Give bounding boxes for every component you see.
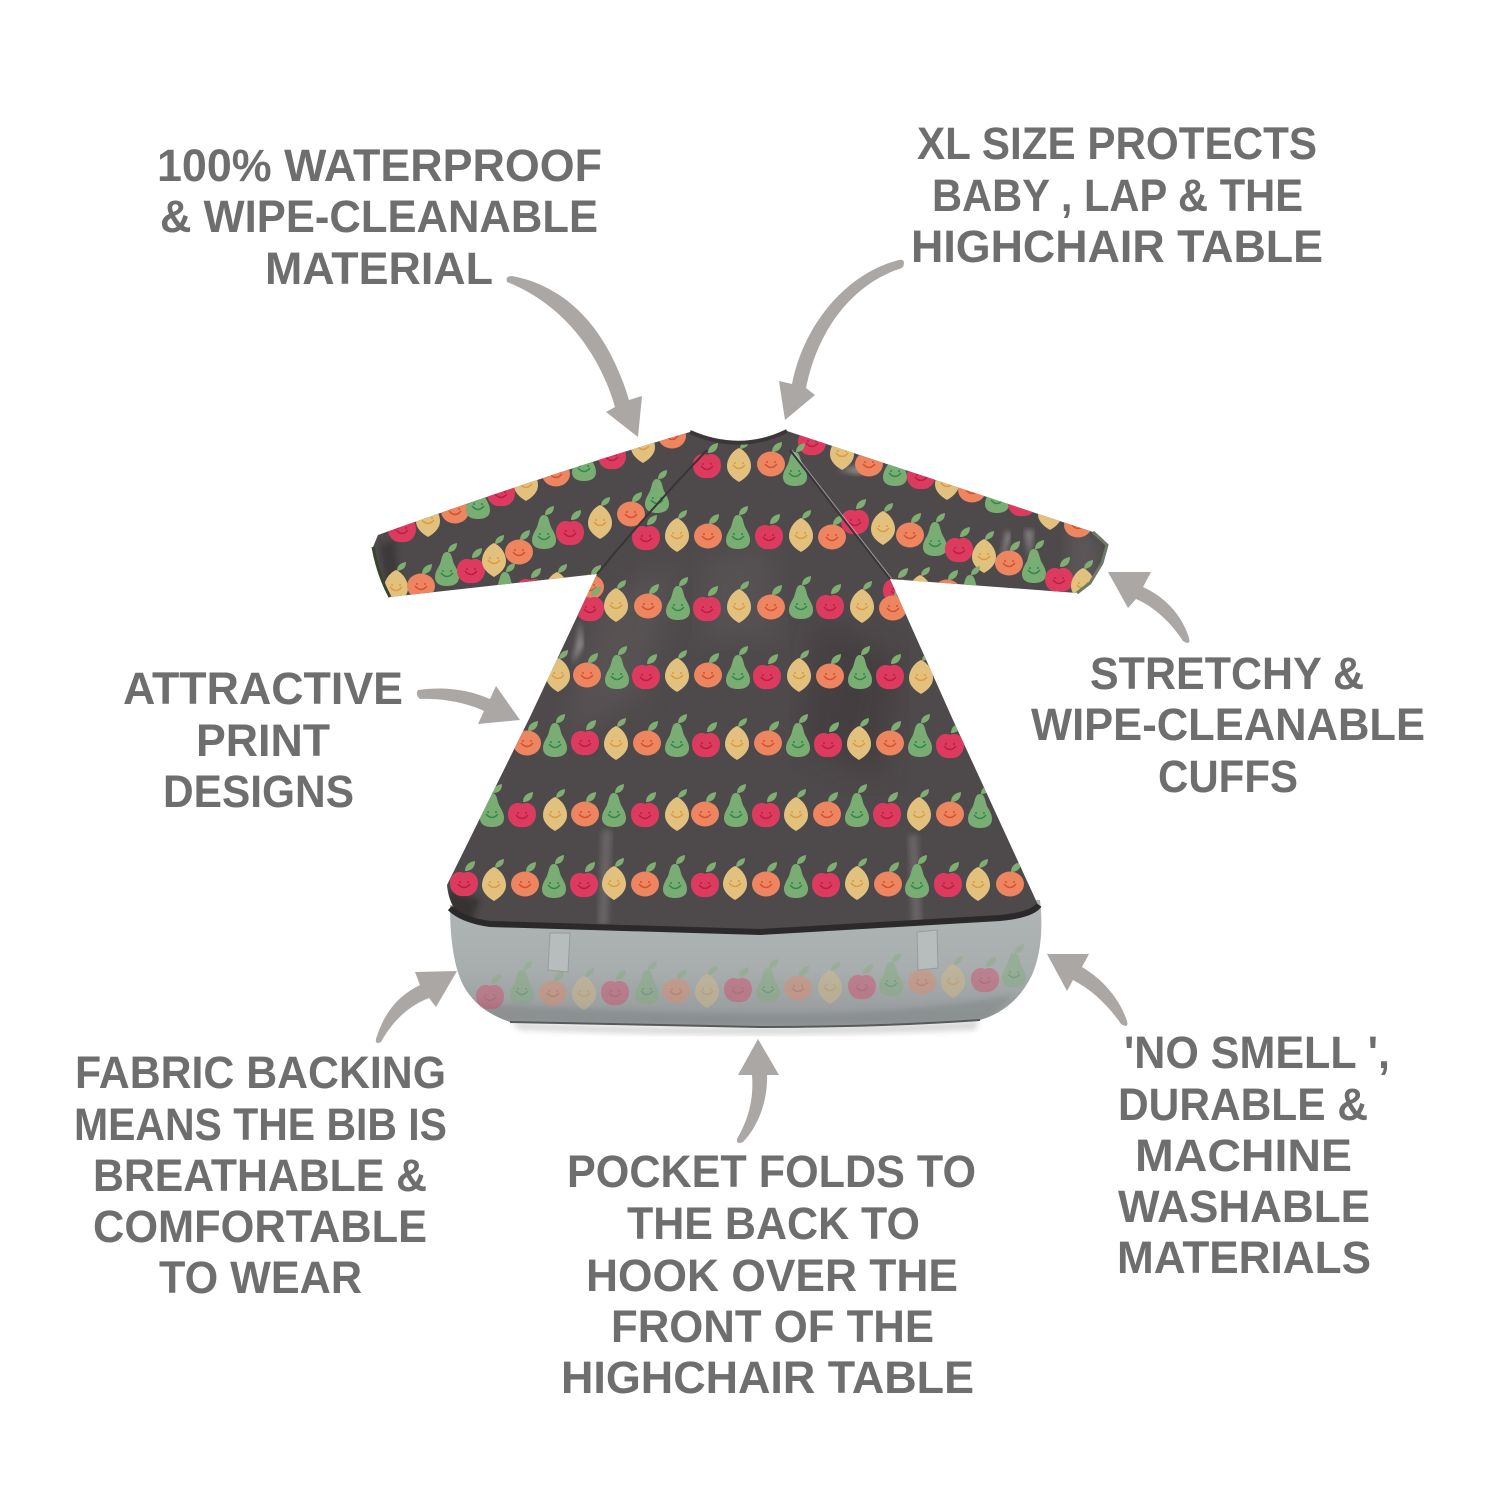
callout: no smell: WASHABLE xyxy=(1118,1181,1370,1232)
body row 4 xyxy=(546,646,933,694)
right sleeve lower row xyxy=(841,499,1095,609)
callout: XL size: HIGHCHAIR TABLE xyxy=(911,221,1323,272)
left sleeve top row xyxy=(388,433,686,542)
callout: attractive print: PRINT xyxy=(196,715,330,766)
callout: no smell: MACHINE xyxy=(1135,1130,1352,1181)
callout: waterproof: MATERIAL xyxy=(265,243,493,294)
callout: XL size: XL SIZE PROTECTS xyxy=(917,118,1317,169)
pocket xyxy=(450,900,1041,1027)
body row 7 xyxy=(450,855,1024,901)
arrow: cuffs xyxy=(1108,572,1189,643)
callout: fabric backing: FABRIC BACKING xyxy=(75,1047,446,1098)
callout: attractive print xyxy=(123,663,403,817)
right sleeve top row xyxy=(798,435,1090,538)
arrow: attractive print to body xyxy=(417,686,520,724)
callout: no smell: 'NO SMELL ', xyxy=(1124,1027,1390,1078)
callout: pocket: POCKET FOLDS TO xyxy=(567,1146,976,1197)
callout: pocket xyxy=(561,1146,976,1403)
garment: long sleeve bib xyxy=(373,414,1107,1035)
bib body xyxy=(373,431,1107,932)
callout: fabric backing: COMFORTABLE xyxy=(93,1201,427,1252)
elastic cuff left xyxy=(373,547,390,597)
body row 2 xyxy=(632,506,846,552)
callout: fabric backing xyxy=(74,1047,447,1303)
fruit print rows xyxy=(384,414,1095,901)
arrow: no smell xyxy=(1047,954,1127,1026)
callout: attractive print: ATTRACTIVE xyxy=(123,663,403,714)
body row 5 xyxy=(513,714,964,760)
callout: waterproof xyxy=(157,140,602,294)
callout: fabric backing: TO WEAR xyxy=(159,1252,362,1303)
fold shading and shine xyxy=(380,460,1100,925)
elastic cuff right xyxy=(1077,532,1107,593)
arrow: fabric backing xyxy=(376,971,457,1043)
callout: no smell: DURABLE & xyxy=(1118,1079,1368,1130)
callout: pocket: HIGHCHAIR TABLE xyxy=(561,1352,974,1403)
callout: XL size: BABY , LAP & THE xyxy=(932,170,1303,221)
soft shadow under bib xyxy=(510,1020,980,1035)
callout: pocket: FRONT OF THE xyxy=(611,1301,934,1352)
raglan seams xyxy=(597,450,892,579)
pocket seam band xyxy=(450,905,1039,932)
velcro tab left xyxy=(548,933,570,972)
callout: XL size xyxy=(911,118,1323,272)
callout: stretchy cuffs: WIPE-CLEANABLE xyxy=(1031,699,1425,750)
callout: pocket: HOOK OVER THE xyxy=(586,1250,958,1301)
arrow: waterproof to shoulder xyxy=(507,276,642,437)
body row 3 xyxy=(576,576,907,623)
arrow: pocket xyxy=(737,1039,779,1143)
callout: stretchy cuffs: STRETCHY & xyxy=(1090,648,1364,699)
callout: fabric backing: MEANS THE BIB IS xyxy=(74,1099,447,1150)
callout: stretchy cuffs: CUFFS xyxy=(1158,751,1298,802)
velcro tab right xyxy=(917,930,938,970)
callout: fabric backing: BREATHABLE & xyxy=(93,1150,427,1201)
neckline binding xyxy=(690,431,787,443)
callout: waterproof: 100% WATERPROOF xyxy=(157,140,602,191)
left sleeve lower row xyxy=(384,470,669,606)
callout: waterproof: & WIPE-CLEANABLE xyxy=(160,191,598,242)
arrow: XL size to neck xyxy=(779,260,904,420)
body row 1 xyxy=(693,440,807,486)
callout: attractive print: DESIGNS xyxy=(163,766,354,817)
ghost fruit print seen through pocket xyxy=(476,944,1026,1010)
callout: no smell xyxy=(1117,1027,1390,1283)
body row 6 xyxy=(480,784,992,831)
infographic canvas xyxy=(76,127,1424,1394)
callout: pocket: THE BACK TO xyxy=(627,1198,920,1249)
callout: stretchy cuffs xyxy=(1031,648,1425,802)
callout: no smell: MATERIALS xyxy=(1117,1232,1371,1283)
